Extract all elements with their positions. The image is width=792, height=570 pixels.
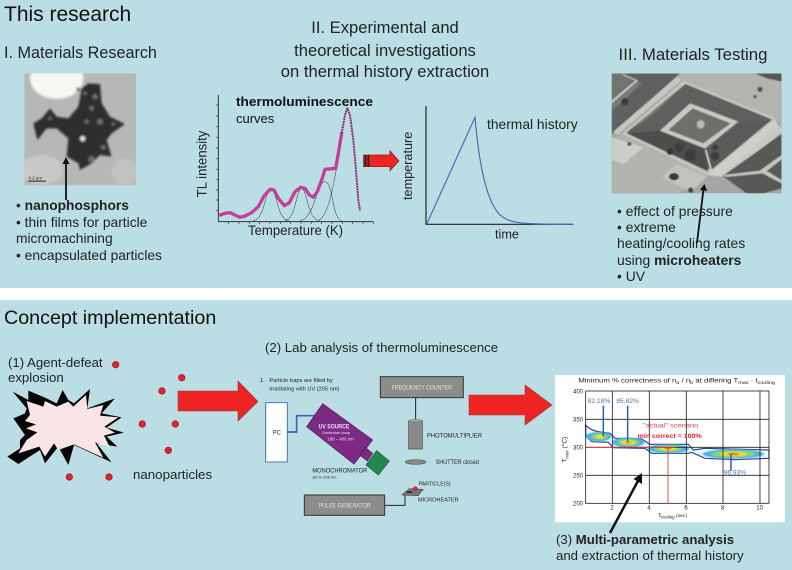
annotations: 96.93% bbox=[724, 470, 746, 477]
label: monochromator: MONOCHROMATOR bbox=[312, 468, 368, 474]
label: nanoparticles: nanoparticles bbox=[133, 467, 212, 482]
photomultiplier: PHOTOMULTIPLIER bbox=[427, 433, 483, 439]
text: materials research bullets: micromachining bbox=[16, 231, 113, 246]
chart title: · t bbox=[749, 377, 758, 384]
arrow: to nanophosphors bbox=[62, 157, 70, 200]
microheater with particle: MICROHEATER bbox=[418, 497, 459, 503]
arrow: lab to analysis bbox=[469, 385, 552, 425]
text: materials testing bullets: • extreme bbox=[617, 219, 676, 235]
label: monochromator: set to 205 nm bbox=[312, 474, 337, 479]
axes bbox=[218, 95, 373, 222]
chart title: / n bbox=[679, 377, 691, 384]
chart: multi-parametric contour bbox=[555, 375, 785, 522]
text: step one: irradiating with UV (205 nm) bbox=[269, 387, 340, 393]
text: multi-parametric analysis: (3) Multi-parametric analysis bbox=[556, 532, 734, 547]
box: pulse generator: PULSE GENERATOR bbox=[319, 504, 371, 510]
axis ticks: cooling bbox=[661, 515, 675, 520]
text: materials research bullets: • nanophosphors bbox=[16, 198, 129, 213]
diagram: lab setup bbox=[260, 377, 483, 515]
label: thermoluminescence curves: thermoluminescence bbox=[236, 94, 373, 109]
text: materials testing bullets: • effect of pressure bbox=[617, 203, 733, 219]
UV source: UV SOURCE bbox=[319, 424, 349, 430]
image: nanophosphor micrograph: 0.2 µm bbox=[29, 175, 42, 180]
label: thermoluminescence curves: curves bbox=[236, 111, 275, 126]
tick marks bbox=[216, 105, 373, 224]
chart: thermal history: thermal history bbox=[487, 116, 578, 132]
axis ticks: 8 bbox=[721, 506, 725, 512]
arrow: to analysis label bbox=[610, 473, 642, 533]
chart: TL curves bbox=[195, 95, 373, 224]
nanoparticle dots bbox=[66, 361, 185, 480]
text: step one: 1. bbox=[260, 378, 265, 384]
axis ticks: 300 bbox=[573, 445, 584, 451]
arrow: explosion to lab bbox=[178, 381, 258, 421]
scenario label: "actual" scenario bbox=[643, 422, 699, 429]
heading: this research: This research bbox=[4, 3, 131, 26]
microheater with particle: PARTICLE(S) bbox=[419, 481, 451, 487]
icon: explosion starburst bbox=[7, 389, 124, 465]
connector: PC to UV source bbox=[287, 416, 318, 432]
annotations: 85.82% bbox=[616, 398, 639, 405]
text: materials testing bullets: using microheaters bbox=[617, 252, 742, 268]
image: nanophosphor micrograph bbox=[24, 73, 136, 186]
heading: concept implementation: Concept implementation bbox=[4, 307, 216, 329]
label: monochromator bbox=[312, 468, 368, 479]
text: step one bbox=[260, 378, 340, 393]
axis ticks bbox=[561, 389, 764, 520]
text: materials research bullets bbox=[16, 198, 162, 263]
shutter: SHUTTER closed bbox=[436, 460, 479, 466]
axis ticks: 10 bbox=[756, 506, 764, 512]
microheater with particle bbox=[402, 481, 459, 503]
panel: concept implementation bbox=[0, 300, 792, 570]
axis ticks: (sec) bbox=[675, 513, 687, 519]
label: thermoluminescence curves bbox=[236, 94, 373, 126]
chart title: Minimum % correctness of n bbox=[578, 377, 656, 384]
chart title: a bbox=[676, 380, 680, 385]
chart: thermal history: time bbox=[495, 228, 519, 242]
arrow: to microheater bbox=[697, 184, 707, 243]
chart title: b bbox=[690, 380, 694, 385]
text: materials testing bullets bbox=[617, 203, 745, 284]
photomultiplier bbox=[409, 419, 483, 449]
axis label: TL intensity bbox=[195, 131, 210, 197]
axis ticks: 2 bbox=[610, 506, 614, 512]
box: PC: PC bbox=[273, 431, 282, 437]
UV source: 180 – 400 nm bbox=[327, 436, 354, 441]
heading: experimental and theoretical investigations: on thermal history extraction bbox=[281, 62, 489, 81]
annotations bbox=[588, 398, 746, 477]
axis ticks: t bbox=[659, 512, 661, 519]
text: materials testing bullets: • UV bbox=[617, 268, 646, 284]
measured curve peak bbox=[342, 108, 360, 211]
grid lines bbox=[586, 391, 769, 503]
contours bbox=[586, 425, 769, 460]
chart title: cooling bbox=[758, 380, 776, 385]
axis ticks: 350 bbox=[573, 417, 584, 423]
chart: thermal history bbox=[401, 106, 578, 242]
axis ticks: 400 bbox=[573, 389, 584, 395]
heading: lab analysis: (2) Lab analysis of thermoluminescence bbox=[265, 340, 498, 355]
text: materials research bullets: • encapsulated particles bbox=[16, 248, 162, 263]
annotations: 82.18% bbox=[588, 398, 610, 405]
heading: experimental and theoretical investigations bbox=[281, 18, 489, 81]
blue markers bbox=[603, 406, 731, 471]
text: multi-parametric analysis: and extraction of thermal history bbox=[556, 548, 744, 563]
box: pulse generator bbox=[304, 495, 385, 515]
min correct label: min correct = 100% bbox=[638, 433, 702, 440]
text: materials testing bullets: heating/cooling rates bbox=[617, 235, 745, 251]
shutter bbox=[405, 460, 479, 466]
UV source: Deuterium lamp bbox=[322, 430, 351, 435]
fitted peaks bbox=[253, 147, 342, 221]
label: temperature K axis: Temperature (K) bbox=[248, 222, 343, 238]
measured curve bbox=[220, 133, 342, 217]
box: PC bbox=[266, 403, 287, 462]
chart title: max bbox=[738, 380, 750, 385]
axis ticks: 4 bbox=[647, 506, 651, 512]
UV source bbox=[307, 404, 389, 475]
axis ticks: 6 bbox=[684, 506, 688, 512]
text: agent-defeat explosion: (1) Agent-defeat bbox=[8, 355, 103, 370]
text: agent-defeat explosion bbox=[8, 355, 103, 385]
text: agent-defeat explosion: explosion bbox=[8, 370, 64, 385]
heading: materials testing: III. Materials Testing bbox=[619, 45, 767, 64]
chart: thermal history: temperature bbox=[401, 132, 415, 200]
heading: experimental and theoretical investigations: II. Experimental and bbox=[311, 18, 459, 37]
heading: materials research: I. Materials Research bbox=[4, 44, 157, 62]
heading: experimental and theoretical investigations: theoretical investigations bbox=[294, 41, 476, 60]
image: microheater micrograph bbox=[612, 73, 782, 193]
chart title: at differing T bbox=[693, 377, 739, 384]
panel: this research bbox=[0, 0, 792, 288]
box: frequency counter: FREQUENCY COUNTER bbox=[392, 385, 453, 391]
arrow: small red bbox=[364, 151, 399, 171]
axis ticks: 250 bbox=[573, 473, 584, 479]
text: step one: Particle traps are filled by bbox=[269, 378, 333, 384]
axis ticks: T bbox=[562, 459, 569, 463]
axis ticks: (°C) bbox=[561, 437, 569, 450]
box: frequency counter bbox=[380, 377, 463, 398]
red scenario lines bbox=[586, 447, 675, 503]
text: multi-parametric analysis bbox=[556, 532, 744, 563]
text: materials research bullets: • thin films for particle bbox=[16, 215, 148, 230]
axis ticks: max bbox=[564, 450, 569, 459]
axis ticks: 200 bbox=[573, 501, 584, 507]
